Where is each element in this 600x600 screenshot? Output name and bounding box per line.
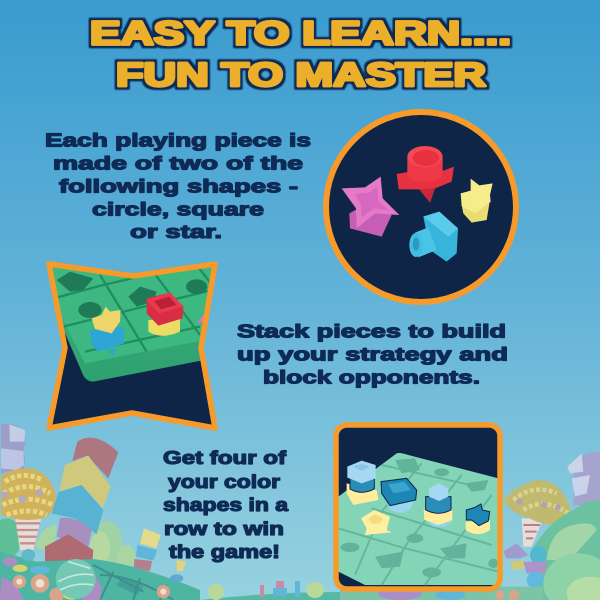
stack three bbox=[424, 483, 453, 527]
panel background bbox=[336, 425, 500, 589]
small towers and bushes bbox=[208, 581, 324, 600]
teal ground and flowers bbox=[0, 549, 200, 600]
scenery: bottom-left stack and plants bbox=[0, 423, 200, 600]
yellow and red stack bbox=[146, 292, 183, 336]
piece: pink star bbox=[342, 177, 399, 237]
text block: each playing piece: Each playing piece is bbox=[45, 130, 311, 150]
text block: get four: Get four of bbox=[163, 447, 287, 468]
text block: stack pieces bbox=[237, 320, 508, 388]
low hill bbox=[200, 592, 340, 600]
green board bbox=[62, 318, 200, 382]
board photo bbox=[52, 267, 212, 382]
pale green board bbox=[338, 453, 498, 585]
star frame fill bbox=[49, 264, 215, 428]
text block: get four: your color bbox=[168, 471, 280, 492]
bottom band below panel bbox=[340, 590, 520, 600]
golden mushroom tree left bbox=[1, 469, 56, 550]
text block: get four: the game! bbox=[169, 541, 280, 562]
striped ball bbox=[56, 559, 96, 599]
blue and yellow stack bbox=[90, 307, 124, 357]
yellow square piece bbox=[361, 510, 392, 535]
small toy tower bbox=[134, 528, 161, 578]
stacked toy pieces tower bbox=[45, 438, 118, 585]
panel: four-pointed star with green board bbox=[40, 262, 230, 428]
piece: red circle on star bbox=[397, 146, 454, 203]
stack one bbox=[347, 461, 378, 505]
text block: each playing piece bbox=[45, 130, 311, 242]
panel: circle with four pieces bbox=[326, 112, 516, 302]
title line 1: EASY TO LEARN.... bbox=[90, 14, 511, 52]
star frame outline bbox=[49, 264, 215, 428]
circle frame bbox=[326, 112, 516, 302]
title line 2: FUN TO MASTER bbox=[116, 56, 486, 93]
title bbox=[90, 14, 511, 93]
text block: get four: row to win bbox=[164, 518, 284, 539]
piece: yellow star and square bbox=[461, 179, 493, 223]
text block: each playing piece: circle, square bbox=[92, 198, 264, 220]
golden mushroom right bbox=[503, 480, 572, 547]
text block: stack pieces: block opponents. bbox=[263, 366, 480, 388]
panel frame bbox=[336, 425, 500, 589]
text block: each playing piece: or star. bbox=[130, 221, 222, 242]
green bush behind tree bbox=[0, 518, 22, 558]
stack four bbox=[466, 504, 490, 534]
scenery: bottom-right plants bbox=[490, 452, 600, 600]
scenery: bottom strip bbox=[200, 581, 520, 600]
stack two: star bbox=[381, 478, 417, 513]
text block: stack pieces: up your strategy and bbox=[237, 344, 508, 364]
text block: stack pieces: Stack pieces to build bbox=[237, 320, 506, 342]
green leaves right bbox=[532, 500, 600, 600]
piece: blue square and circle bbox=[409, 212, 458, 262]
purple tower right bbox=[567, 452, 600, 505]
green bushes bbox=[35, 521, 135, 568]
panel: rounded square with pale board bbox=[336, 425, 500, 589]
flowers right bbox=[490, 543, 547, 600]
text block: get four: shapes in a bbox=[163, 494, 289, 515]
mushroom tower left bbox=[1, 423, 26, 473]
text block: each playing piece: made of two of the bbox=[53, 152, 303, 174]
text block: get four bbox=[163, 447, 289, 562]
text block: each playing piece: following shapes - bbox=[59, 176, 298, 196]
